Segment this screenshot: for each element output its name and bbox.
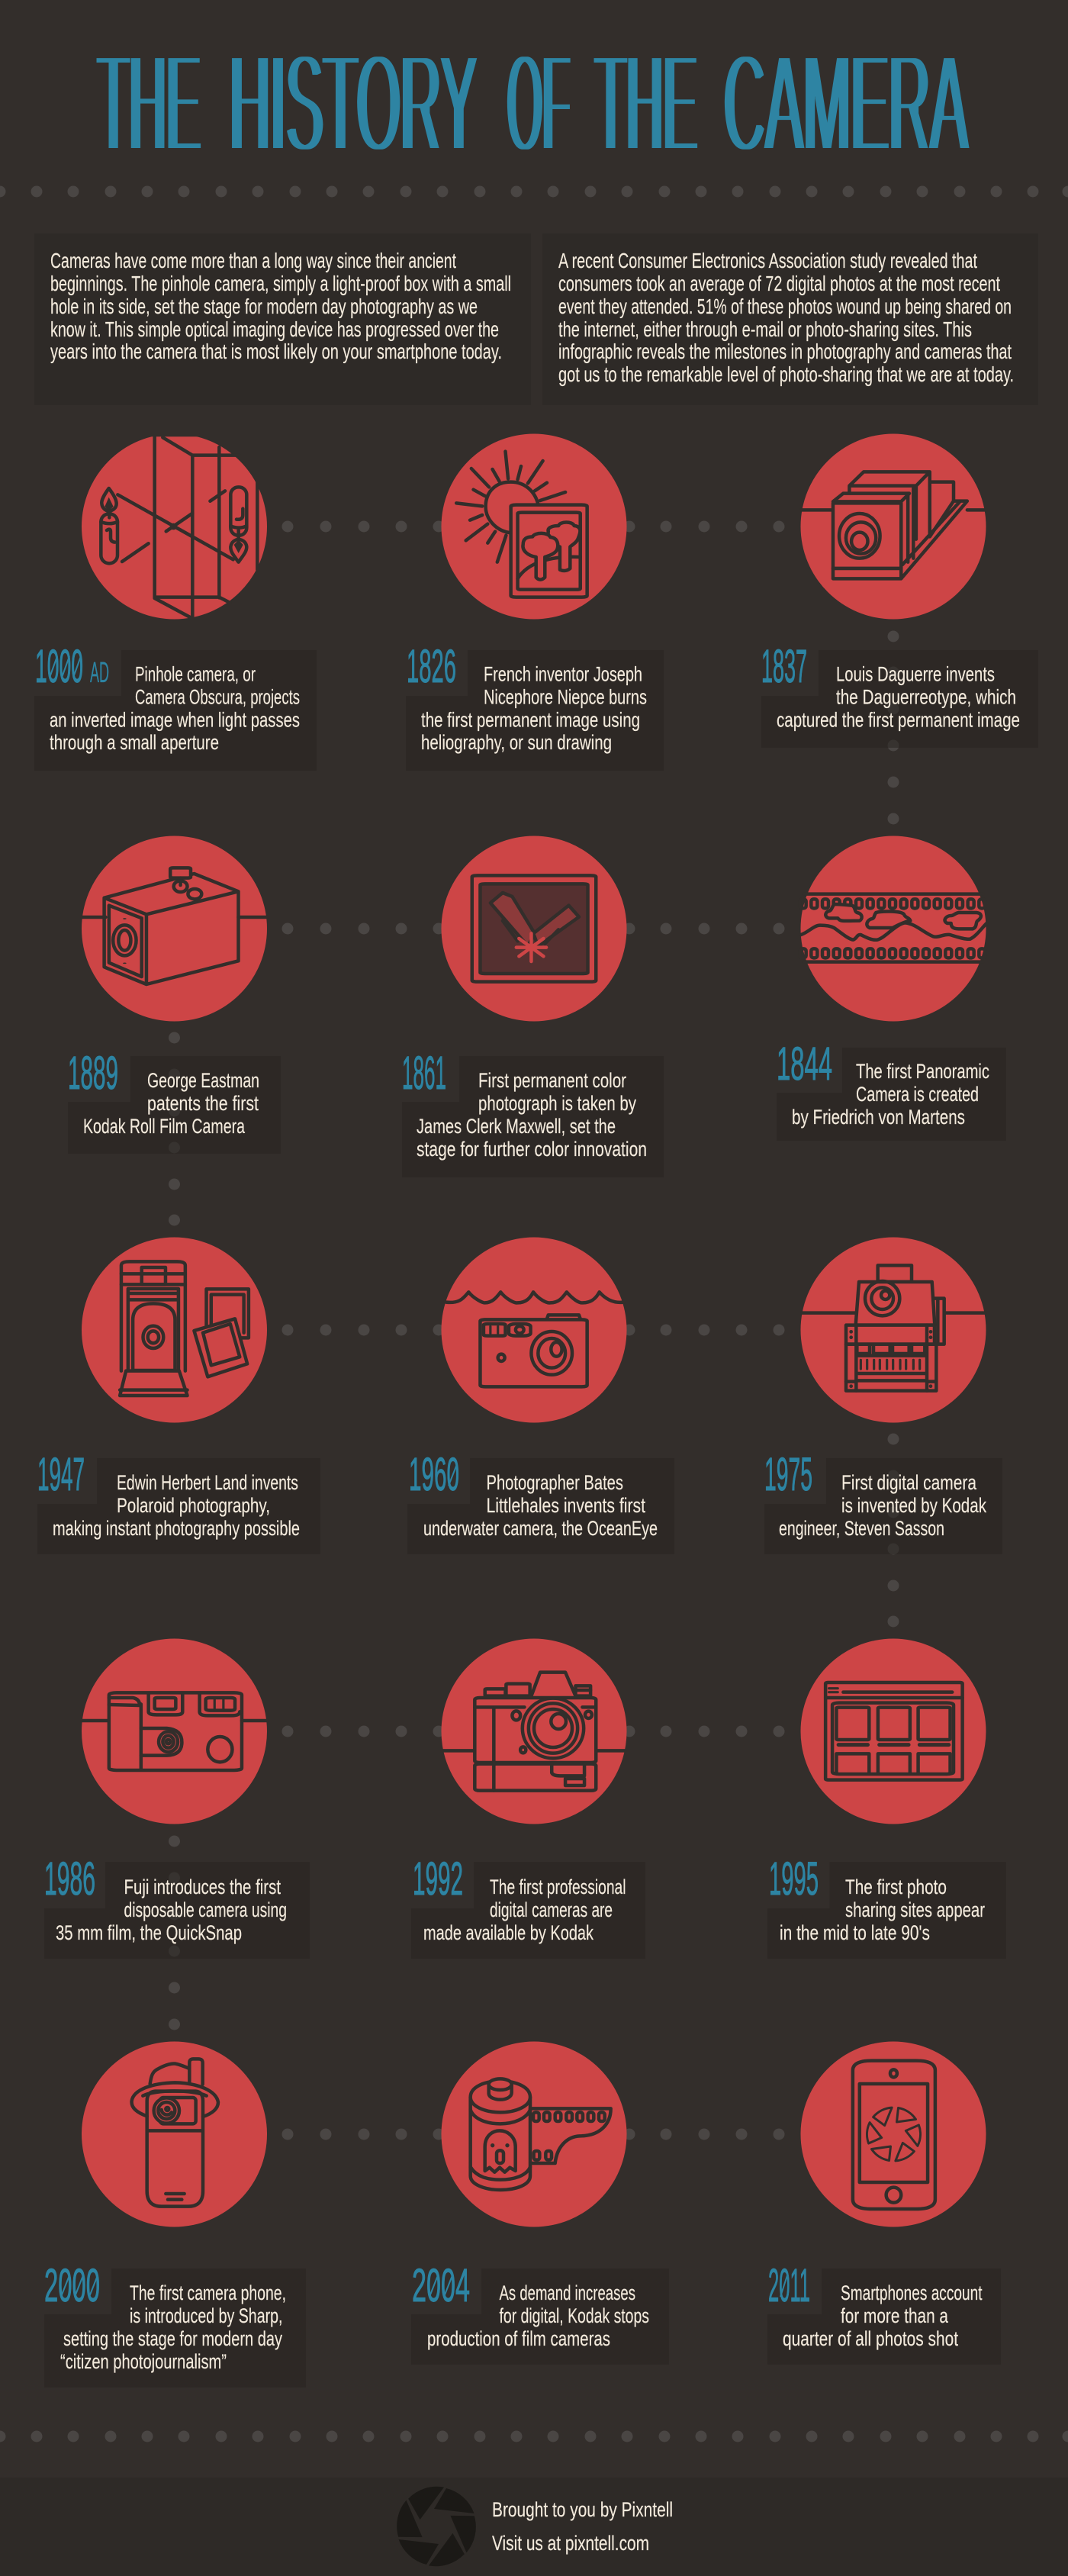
description box	[37, 1458, 320, 1554]
description: 35 mm film, the QuickSnap	[56, 1921, 242, 1944]
description box	[44, 2268, 306, 2388]
icon circle: daguerreotype	[801, 433, 986, 620]
icon circle: professional digital camera	[441, 1639, 627, 1824]
icon circle: disposable camera	[82, 1639, 267, 1824]
icon circle: pinhole camera	[82, 433, 267, 620]
description: quarter of all photos shot	[783, 2327, 958, 2350]
year	[412, 2259, 470, 2311]
panel: 1995 photo sharing sites: 1995	[769, 1853, 819, 1905]
icon circle: photo sharing website	[801, 1639, 986, 1824]
description: in the mid to late 90's	[780, 1921, 930, 1944]
icon circle: underwater camera	[441, 1238, 627, 1422]
description	[53, 1471, 300, 1540]
panel: 1975 digital camera: 1975	[764, 1448, 812, 1500]
description: Edwin Herbert Land invents	[117, 1471, 298, 1494]
description: setting the stage for modern day	[63, 2327, 282, 2350]
panel: 2011 smartphones	[767, 2042, 1001, 2365]
description: First permanent color	[478, 1069, 626, 1092]
description: Kodak Roll Film Camera	[83, 1115, 246, 1138]
title: HISTORY	[230, 24, 478, 181]
description: photograph is taken by	[478, 1092, 636, 1115]
description	[50, 663, 300, 754]
title: THE	[98, 24, 201, 181]
description: making instant photography possible	[53, 1517, 300, 1540]
description	[777, 663, 1020, 732]
panel: 1992 professional digital camera	[411, 1639, 645, 1959]
description: Smartphones account	[841, 2281, 983, 2304]
description box	[761, 650, 1038, 748]
description: stage for further color innovation	[417, 1138, 647, 1161]
panel: 1837 daguerreotype	[761, 433, 1038, 748]
description box	[407, 1458, 674, 1554]
description: First digital camera	[841, 1471, 977, 1494]
description box	[34, 650, 317, 771]
panel: intro left	[34, 233, 531, 405]
description: underwater camera, the OceanEye	[423, 1517, 658, 1540]
icon circle: color photograph	[441, 836, 627, 1021]
description: Camera Obscura, projects	[135, 686, 300, 709]
year: 2000	[44, 2259, 100, 2311]
description: made available by Kodak	[423, 1921, 594, 1944]
description	[427, 2281, 649, 2350]
panel: 1960 underwater camera	[407, 1238, 674, 1554]
description: James Clerk Maxwell, set the	[417, 1115, 616, 1138]
panel: intro right	[542, 233, 1038, 405]
icon circle: kodak box camera	[82, 836, 267, 1021]
description: heliography, or sun drawing	[421, 731, 612, 754]
description: sharing sites appear	[845, 1898, 985, 1921]
description: “citizen photojournalism”	[60, 2350, 227, 2373]
description	[780, 1876, 985, 1944]
panel: 1889 kodak roll film camera	[68, 836, 281, 1154]
footer credits: Brought to you by Pixntell	[492, 2498, 673, 2521]
year	[768, 2259, 810, 2311]
footer credits: Visit us at pixntell.com	[492, 2532, 649, 2555]
description: Pinhole camera, or	[135, 663, 256, 686]
panel: 1986 disposable camera	[44, 1639, 310, 1959]
icon circle: smartphone	[801, 2042, 986, 2227]
description: engineer, Steven Sasson	[779, 1517, 944, 1540]
title: OF	[507, 24, 570, 181]
description: The first Panoramic	[856, 1060, 989, 1083]
description: patents the first	[147, 1092, 259, 1115]
year: 1000	[35, 640, 83, 692]
description: Nicephore Niepce burns	[484, 686, 647, 709]
panel: 1000 AD pinhole camera: AD	[90, 657, 109, 689]
panel: 1995 photo sharing sites	[767, 1639, 1006, 1959]
panel: intro left: know it. This simple optical imaging device has progressed over the	[50, 317, 499, 341]
description	[423, 1471, 658, 1540]
panel: intro left: beginnings. The pinhole camera, simply a light-proof box with a small	[50, 272, 511, 295]
description	[779, 1471, 986, 1540]
panel: intro left: years into the camera that is most likely on your smartphone today.	[50, 340, 502, 363]
panel: 1947 polaroid: 1947	[37, 1448, 85, 1500]
icon circle: camera phone	[82, 2042, 267, 2227]
description	[83, 1069, 259, 1138]
description box	[777, 1048, 1006, 1141]
description	[421, 663, 647, 754]
icon: pixntell aperture logo	[384, 2475, 488, 2576]
description: by Friedrich von Martens	[792, 1106, 965, 1129]
description: The first camera phone,	[130, 2281, 286, 2304]
description box	[406, 650, 664, 771]
panel: 1837 daguerreotype: 1837	[761, 640, 807, 692]
description: Fuji introduces the first	[124, 1876, 281, 1898]
panel: 1975 digital camera	[764, 1238, 1002, 1554]
panel: 1861 color photograph	[402, 836, 664, 1177]
panel: 1826 heliography: 1826	[407, 640, 456, 692]
description: Polaroid photography,	[117, 1494, 270, 1517]
panel: 1992 professional digital camera: 1992	[413, 1853, 463, 1905]
description box	[767, 1862, 1006, 1959]
panel: 1861 color photograph: 1861	[402, 1047, 446, 1099]
description: Photographer Bates	[487, 1471, 623, 1494]
panel: 1826 heliography	[406, 433, 664, 771]
panel: 1000 AD pinhole camera	[34, 433, 317, 771]
description: for more than a	[841, 2304, 949, 2327]
panel: 1960 underwater camera: 1960	[409, 1448, 459, 1500]
description box	[764, 1458, 1002, 1554]
description: As demand increases	[499, 2281, 635, 2304]
description: Camera is created	[856, 1083, 979, 1106]
title: THE	[595, 24, 697, 181]
icon circle: film canister	[441, 2042, 627, 2227]
description box	[411, 1862, 645, 1959]
footer credits	[492, 2498, 673, 2555]
description: is introduced by Sharp,	[130, 2304, 282, 2327]
description: the first permanent image using	[421, 709, 640, 732]
panel: 1947 polaroid	[37, 1238, 320, 1554]
year	[44, 2259, 100, 2311]
description	[60, 2281, 286, 2373]
description: The first photo	[845, 1876, 947, 1898]
description: for digital, Kodak stops	[499, 2304, 649, 2327]
year: 2004	[412, 2259, 470, 2311]
description: digital cameras are	[490, 1898, 613, 1921]
description	[792, 1060, 989, 1129]
footer band	[0, 2478, 1068, 2576]
panel: 1986 disposable camera: 1986	[44, 1853, 95, 1905]
description: French inventor Joseph	[484, 663, 642, 686]
description box	[402, 1056, 664, 1177]
description box	[411, 2268, 669, 2365]
year	[409, 1448, 459, 1500]
description: production of film cameras	[427, 2327, 610, 2350]
description: is invented by Kodak	[841, 1494, 986, 1517]
year: 1844	[777, 1038, 832, 1090]
panel: 1844 panoramic camera	[777, 836, 1006, 1141]
icon circle: panoramic film	[800, 836, 986, 1021]
description box	[767, 2268, 1001, 2365]
description: an inverted image when light passes	[50, 709, 300, 732]
description: Littlehales invents first	[487, 1494, 645, 1517]
description	[417, 1069, 647, 1161]
description	[56, 1876, 287, 1944]
panel: 2011 smartphones: 2011	[768, 2259, 810, 2311]
icon circle: first digital camera	[801, 1238, 986, 1422]
panel: 2000 camera phone	[44, 2042, 306, 2388]
description: through a small aperture	[50, 731, 219, 754]
icon circle: sun and picture	[441, 433, 627, 620]
description: disposable camera using	[124, 1898, 287, 1921]
description: George Eastman	[147, 1069, 259, 1092]
description	[783, 2281, 983, 2350]
description box	[44, 1862, 310, 1959]
panel: 1889 kodak roll film camera: 1889	[68, 1047, 118, 1099]
description: the Daguerreotype, which	[836, 686, 1016, 709]
description: Louis Daguerre invents	[836, 663, 995, 686]
panel: intro left: hole in its side, set the stage for modern day photography as we	[50, 295, 478, 318]
icon circle: polaroid camera	[82, 1238, 267, 1422]
description box	[68, 1056, 281, 1154]
panel: 2004 film production stops	[411, 2042, 669, 2365]
description: The first professional	[490, 1876, 626, 1898]
panel: intro left: Cameras have come more than a long way since their ancient	[50, 249, 456, 272]
description	[423, 1876, 626, 1944]
